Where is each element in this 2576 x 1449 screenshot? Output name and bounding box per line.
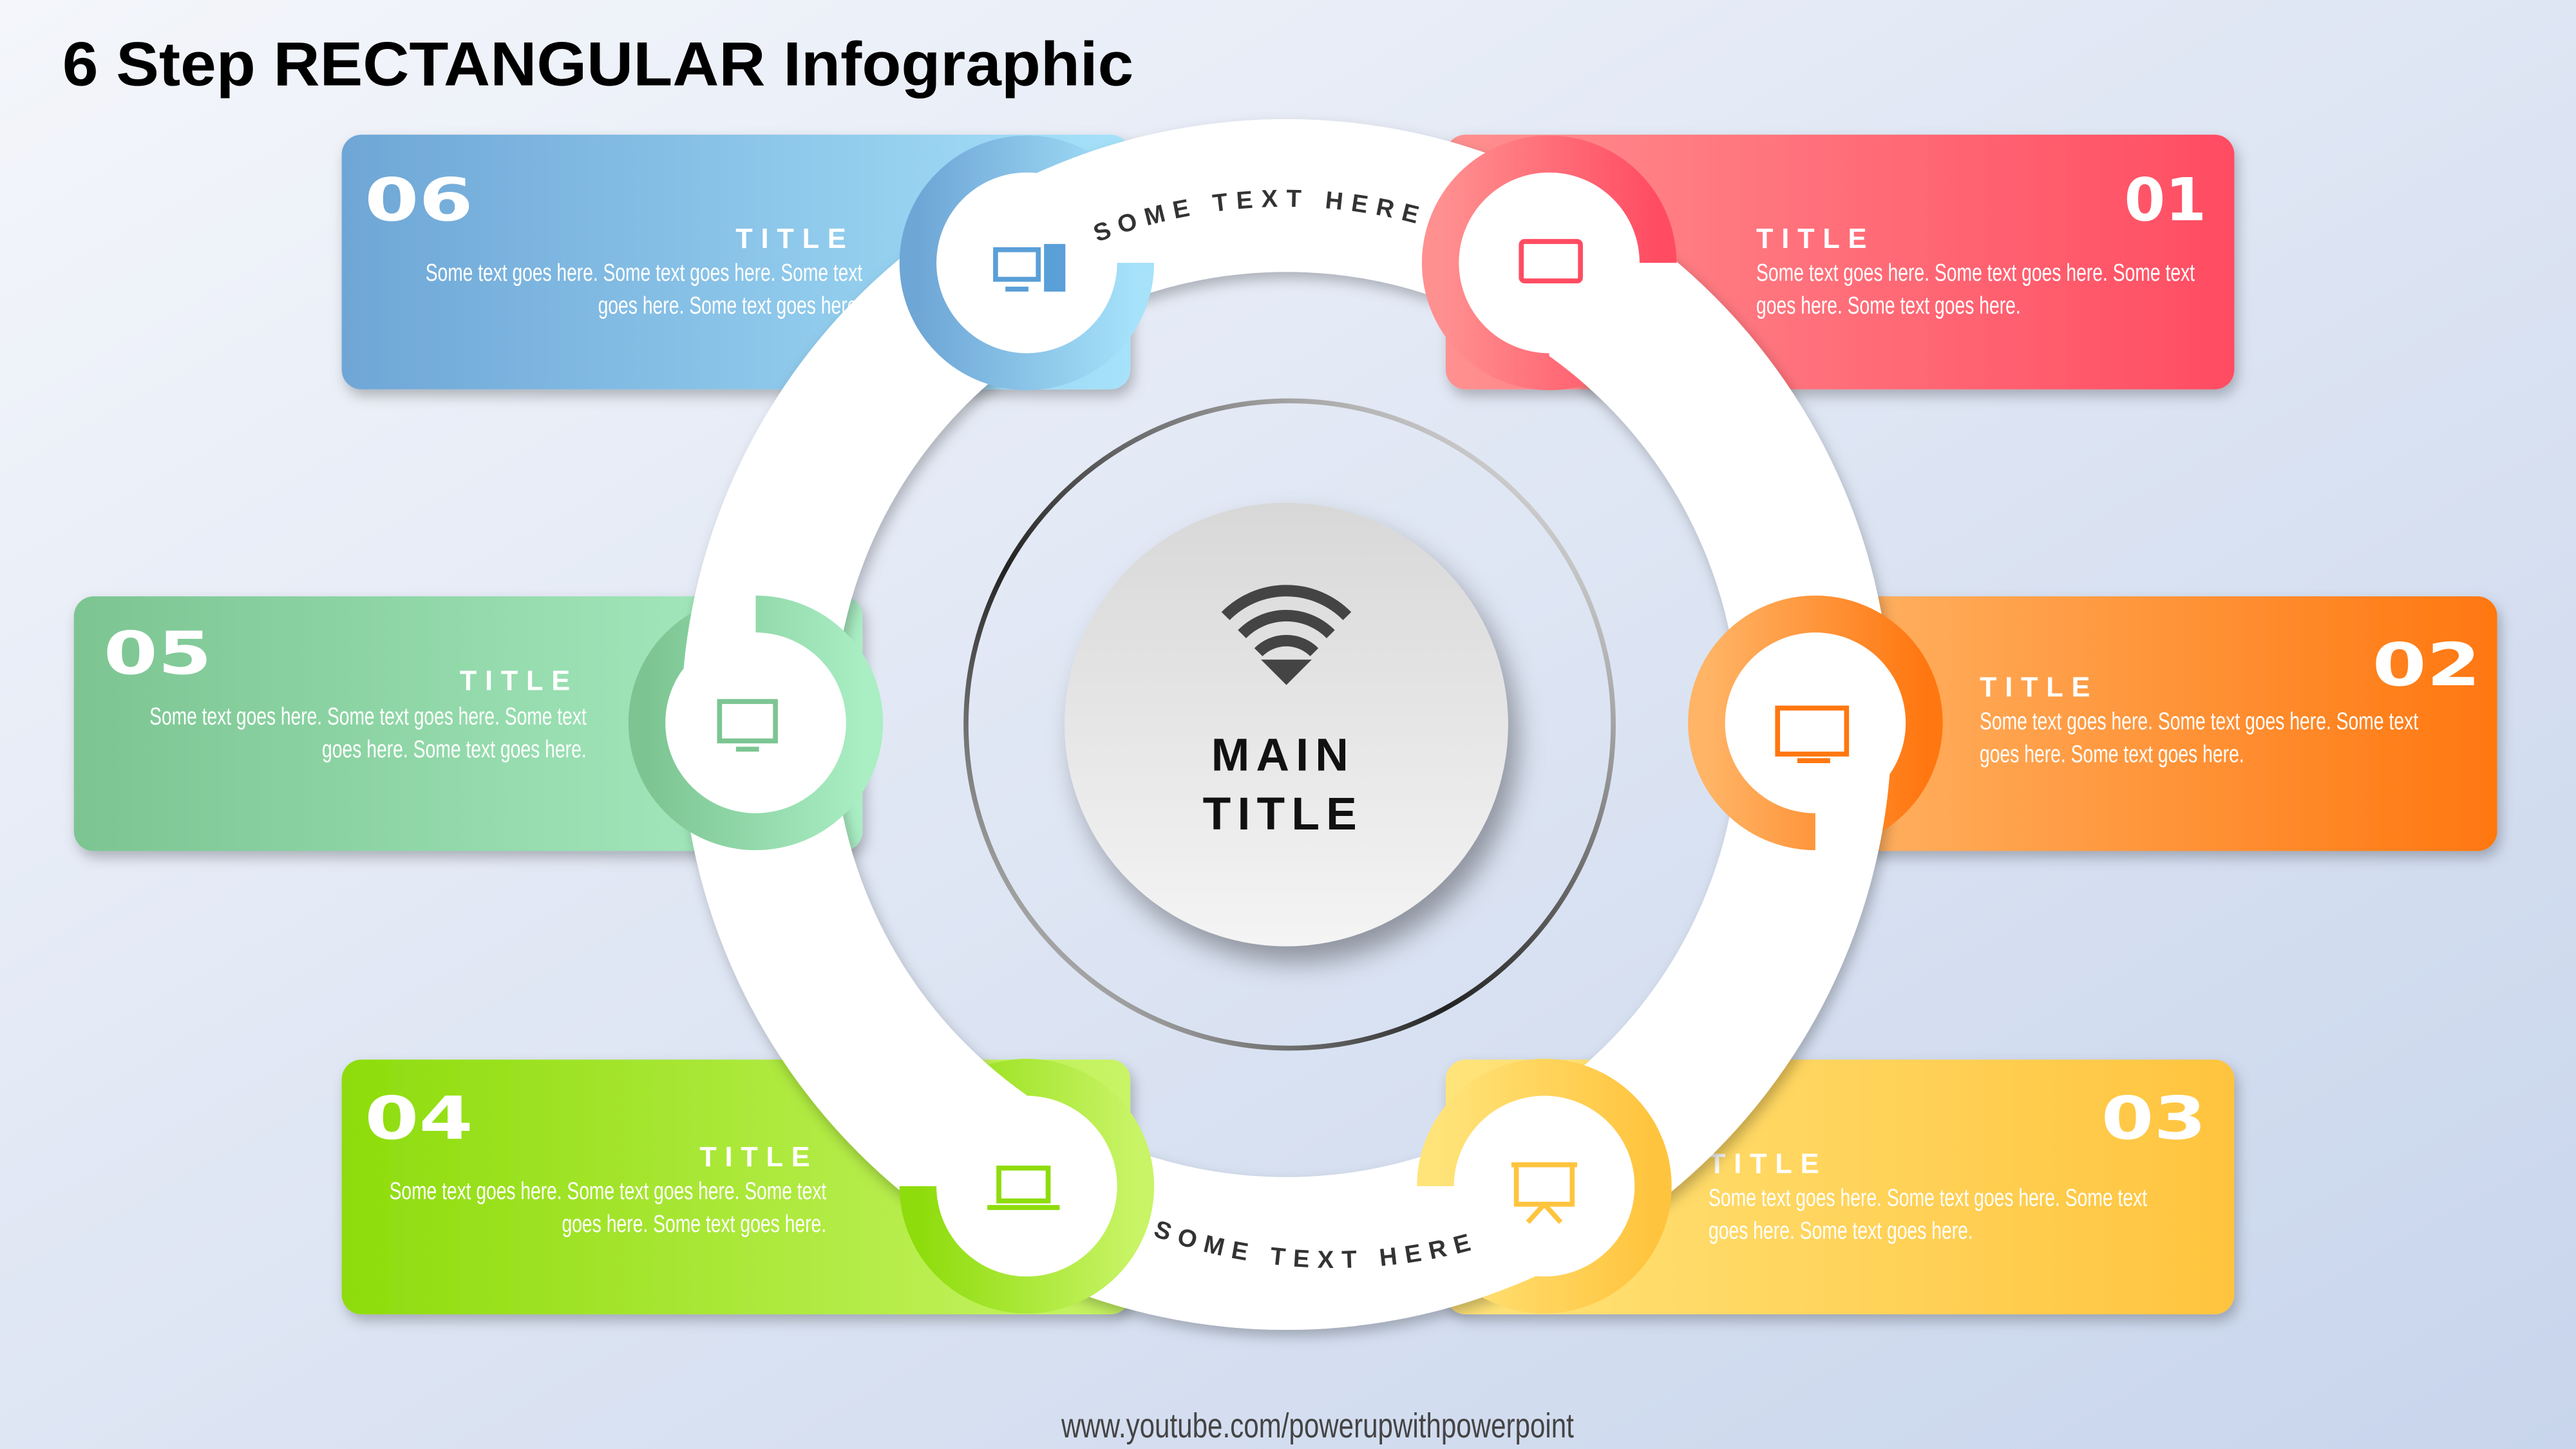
- icon holders: [665, 173, 1906, 1276]
- panel 04: [342, 1059, 1130, 1314]
- icon: tablet 01: [1521, 242, 1580, 281]
- panel 04: goes here. Some text goes here.: [562, 1210, 826, 1238]
- icon: desktop 06: [996, 247, 1063, 289]
- panel 03: Some text goes here. Some text goes here. Some text: [1709, 1184, 2147, 1211]
- panel 02: goes here. Some text goes here.: [1980, 741, 2244, 768]
- big white ring: [757, 196, 1815, 1253]
- colored rings: [647, 155, 1924, 1294]
- panel 02: TITLE: [1980, 672, 2098, 703]
- panel 05: goes here. Some text goes here.: [322, 735, 587, 763]
- panel 02: Some text goes here. Some text goes here. Some text: [1980, 708, 2418, 735]
- panel 04: TITLE: [699, 1142, 818, 1173]
- panel 01: goes here. Some text goes here.: [1756, 292, 2021, 319]
- curved text bottom: SOME TEXT HERE: [1154, 1221, 1471, 1268]
- center circle: [1065, 503, 1508, 946]
- icon: presentation 03: [1511, 1165, 1577, 1222]
- footer url: www.youtube.com/powerupwithpowerpoint: [1061, 1407, 1574, 1445]
- panel 06: [342, 135, 1130, 390]
- panel 02: [1807, 596, 2497, 851]
- panel 02: 02: [2372, 630, 2481, 699]
- icon: monitor 05: [719, 701, 775, 749]
- panel 05: Some text goes here. Some text goes here. Some text: [149, 703, 587, 730]
- panel 06: TITLE: [735, 223, 855, 254]
- icon: monitor 02: [1777, 708, 1846, 761]
- curved text top: SOME TEXT HERE: [1094, 189, 1419, 241]
- panel 03: 03: [2101, 1084, 2206, 1153]
- panel 04: Some text goes here. Some text goes here. Some text: [390, 1177, 826, 1205]
- panel 04: 04: [365, 1084, 473, 1153]
- panel 03: TITLE: [1709, 1148, 1827, 1179]
- inner thin ring: [966, 401, 1613, 1048]
- panel 05: 05: [104, 619, 212, 688]
- center circle: MAIN: [1211, 729, 1355, 781]
- panel 06: goes here. Some text goes here.: [598, 292, 862, 319]
- panel 06: 06: [365, 166, 473, 234]
- icon: laptop 04: [987, 1168, 1059, 1208]
- panel 01: [1446, 135, 2234, 390]
- center circle: TITLE: [1203, 788, 1363, 840]
- panel 01: TITLE: [1756, 223, 1875, 254]
- panel 01: 01: [2124, 166, 2206, 234]
- panel 05: [74, 596, 862, 851]
- icon: wifi: [1226, 591, 1347, 677]
- panel 06: Some text goes here. Some text goes here. Some text: [426, 259, 863, 287]
- panel 05: TITLE: [460, 665, 578, 696]
- panel 03: goes here. Some text goes here.: [1709, 1217, 1973, 1244]
- panel 01: Some text goes here. Some text goes here. Some text: [1756, 259, 2195, 287]
- title: 6 Step RECTANGULAR Infographic: [62, 29, 1133, 99]
- panel 03: [1446, 1059, 2234, 1314]
- ring overlap bands: [757, 196, 1815, 1253]
